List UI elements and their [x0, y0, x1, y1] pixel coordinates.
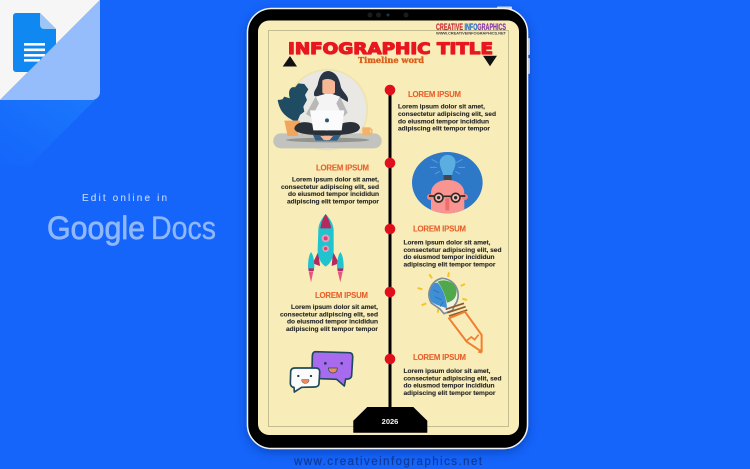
text block 5: LOREM IPSUM [413, 353, 466, 362]
illustration: woman with laptop [273, 70, 382, 150]
title: INFOGRAPHIC TITLE [288, 39, 493, 58]
text block 1: adipiscing elit tempor tempor [398, 126, 490, 133]
text block 4: do eiusmod tempor incididun [287, 318, 378, 326]
arrow down [483, 56, 497, 66]
website url: www.creativeinfographics.net [293, 456, 483, 468]
text block 3 [404, 224, 502, 268]
text block 4: adipiscing elit tempor tempor [286, 326, 378, 333]
illustration: brain bulb and pencil [418, 272, 482, 354]
illustration: rocket [308, 214, 344, 282]
legs [294, 122, 360, 136]
corner fold with Google Docs icon [0, 0, 100, 165]
brand logo: WWW.CREATIVEINFOGRAPHICS.NET [436, 30, 507, 36]
logo text: Google Docs: Google [47, 210, 145, 246]
brand logo [436, 22, 507, 36]
text block 5: consectetur adipiscing elit, sed [404, 375, 502, 382]
camera dots [368, 12, 408, 18]
text block 1: consectetur adipiscing elit, sed [398, 111, 496, 118]
text block 4 [280, 291, 378, 333]
text block 1: do eiusmod tempor incididun [398, 118, 489, 125]
text block 3: Lorem ipsum dolor sit amet, [404, 240, 491, 247]
text block 4: consectetur adipiscing elit, sed [280, 311, 378, 318]
text block 3: LOREM IPSUM [413, 224, 466, 234]
torso [311, 94, 344, 113]
text block 2: Lorem ipsum dolor sit amet, [292, 176, 379, 184]
text block 2: adipiscing elit tempor tempor [287, 198, 379, 205]
logo text: Google Docs [47, 210, 216, 246]
logo text: Google Docs: Docs [151, 210, 216, 246]
subtitle: Timeline word [358, 55, 424, 65]
mug [362, 127, 370, 135]
year badge [353, 407, 427, 433]
timeline [353, 85, 427, 433]
text block 5: Lorem ipsum dolor sit amet, [404, 368, 491, 375]
face [322, 79, 335, 95]
text block 5 [404, 353, 502, 397]
text block 3: consectetur adipiscing elit, sed [404, 247, 502, 254]
timeline dots [385, 85, 395, 364]
arrow up [283, 56, 297, 66]
laptop [310, 110, 344, 130]
brand logo: CREATIVE INFOGRAPHICS [436, 22, 506, 32]
text block 3: do eiusmod tempor incididun [404, 254, 494, 261]
text block 4: Lorem ipsum dolor sit amet, [291, 304, 378, 311]
text: Edit online in: Edit online in [82, 193, 167, 204]
year badge: 2026 [382, 417, 398, 426]
tablet [248, 6, 530, 448]
pot [284, 121, 300, 136]
text block 1: Lorem ipsum dolor sit amet, [398, 104, 485, 110]
text block 1 [398, 90, 496, 133]
screen [258, 20, 519, 435]
text block 2: consectetur adipiscing elit, sed [281, 184, 379, 191]
text block 2: do eiusmod tempor incididun [288, 191, 379, 198]
text block 5: adipiscing elit tempor tempor [404, 390, 496, 397]
illustration: chat bubbles [290, 352, 353, 392]
text block 4: LOREM IPSUM [315, 291, 368, 300]
text block 1: LOREM IPSUM [408, 90, 461, 99]
illustration: idea head [412, 152, 483, 214]
plant [278, 83, 308, 121]
text block 5: do eiusmod tempor incididun [404, 382, 494, 390]
text block 3: adipiscing elit tempor tempor [404, 262, 496, 268]
text block 2 [281, 164, 379, 205]
hair [314, 71, 348, 102]
icon: document [13, 13, 56, 72]
text block 2: LOREM IPSUM [316, 164, 369, 172]
